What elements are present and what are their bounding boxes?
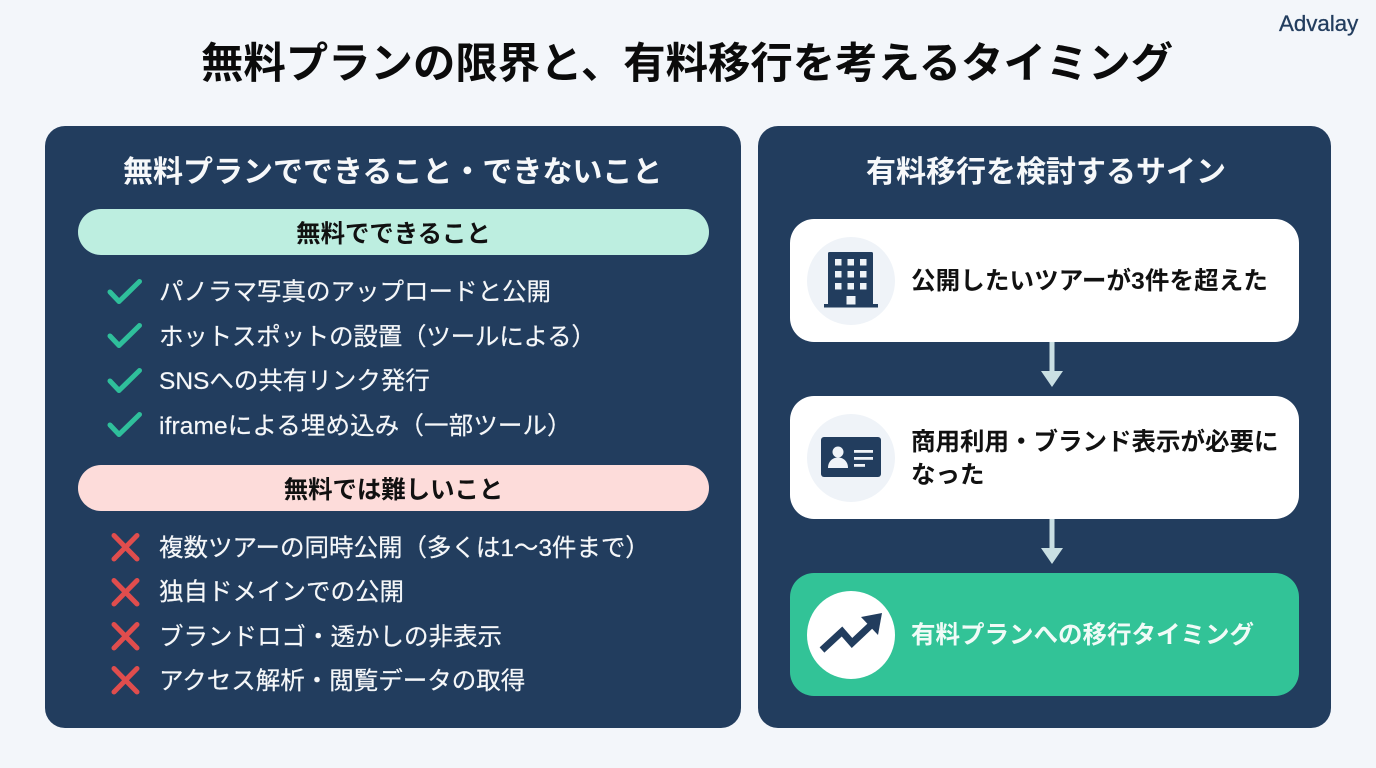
card text: 公開したいツアーが3件を超えた [911, 268, 1268, 295]
icon: trending up arrow [807, 591, 895, 679]
icon: cross 2 [112, 578, 140, 606]
icon: cross 4 [112, 666, 140, 694]
icon: check 1 [108, 279, 142, 304]
panel: signs to consider upgrading [758, 126, 1331, 728]
panel: free plan can and cannot [45, 126, 741, 728]
card text: 商用利用・ブランド表示が必要に [911, 429, 1278, 456]
arrow 2 [1041, 519, 1063, 564]
panel heading: free plan: 無料プランでできること・できないこと [123, 156, 662, 189]
list item: 独自ドメインでの公開 [159, 579, 404, 606]
list item: 複数ツアーの同時公開（多くは1～3件まで） [159, 535, 650, 562]
list item: アクセス解析・閲覧データの取得 [159, 668, 525, 695]
icon: cross 3 [112, 622, 140, 650]
pill: can do for free [78, 209, 709, 255]
card: commercial use [790, 396, 1299, 519]
icon: cross 1 [112, 533, 140, 562]
brand logo: Advalay [1279, 11, 1358, 36]
list item: iframeによる埋め込み（一部ツール） [159, 413, 572, 440]
list item: ブランドロゴ・透かしの非表示 [159, 624, 502, 651]
title: 無料プランの限界と、有料移行を考えるタイミング [201, 40, 1173, 87]
card text [911, 428, 1278, 489]
pill: hard for free [78, 465, 709, 511]
card text: 有料プランへの移行タイミング [911, 622, 1254, 649]
card: upgrade timing [790, 573, 1299, 696]
icon: building [807, 237, 895, 325]
panel heading: signs: 有料移行を検討するサイン [866, 156, 1226, 189]
pill: can do for free: 無料でできること [296, 221, 491, 248]
list item: パノラマ写真のアップロードと公開 [159, 279, 551, 306]
icon: check 2 [108, 323, 142, 348]
list item: ホットスポットの設置（ツールによる） [159, 324, 596, 351]
card text: なった [911, 462, 984, 489]
pill: hard for free: 無料では難しいこと [284, 477, 503, 504]
icon: id card [807, 414, 895, 502]
icon: check 4 [108, 412, 142, 437]
arrow 1 [1041, 342, 1063, 387]
icon: check 3 [108, 368, 142, 393]
card: more than three tours [790, 219, 1299, 342]
list item: SNSへの共有リンク発行 [159, 368, 430, 395]
